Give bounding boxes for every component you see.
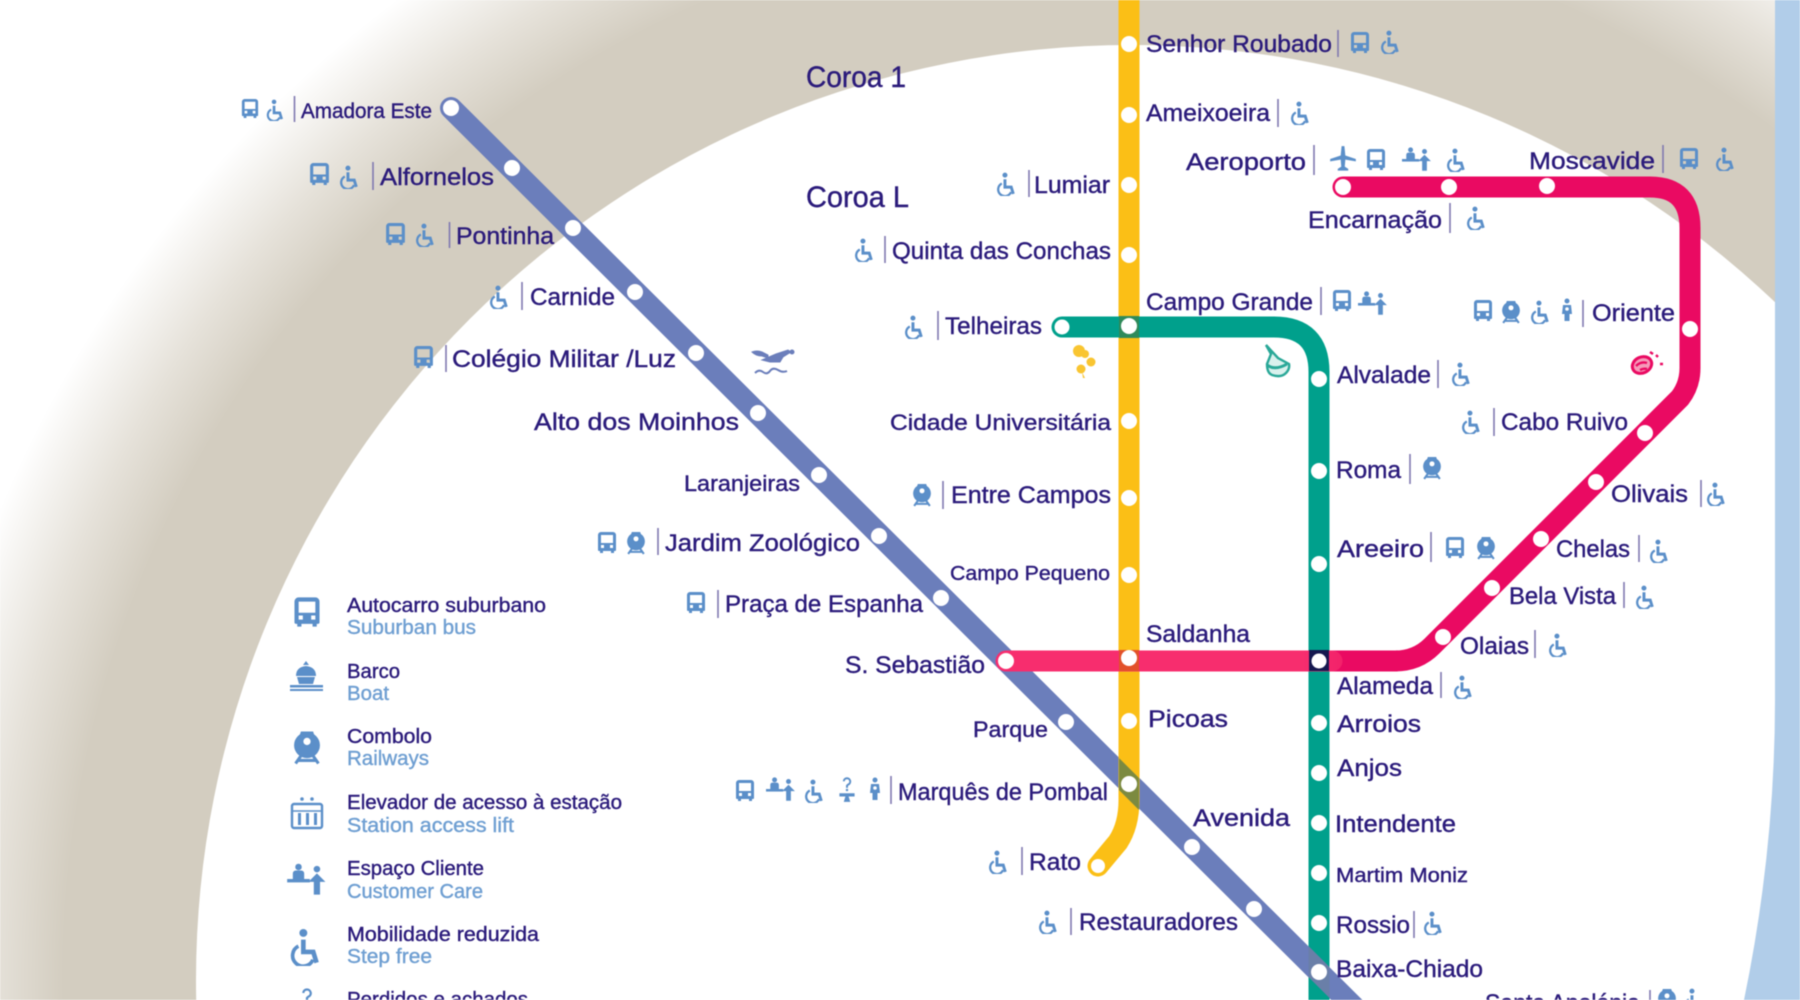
zone labels: Coroa L <box>806 181 909 214</box>
legend: suburban bus: Autocarro suburbano <box>347 595 546 617</box>
Encarnação <box>1308 203 1483 234</box>
Areeiro: Areeiro <box>1337 536 1424 563</box>
Amadora Este <box>242 96 432 123</box>
station labels: blue line <box>242 96 1483 983</box>
Olaias: Olaias <box>1460 633 1529 660</box>
Areeiro <box>1337 532 1495 563</box>
Chelas <box>1556 535 1666 563</box>
right blue margin band <box>1744 0 1800 1000</box>
Roma: Roma <box>1336 457 1402 484</box>
icon: swimmer artwork near Colégio Militar <box>752 350 794 373</box>
Oriente <box>1474 298 1675 327</box>
Olaias <box>1460 630 1565 660</box>
Moscavide: Moscavide <box>1529 148 1655 175</box>
Encarnação: Encarnação <box>1308 207 1442 234</box>
Olivais <box>1611 480 1723 508</box>
Marquês de Pombal <box>736 776 1108 806</box>
Lumiar: Lumiar <box>1034 172 1110 199</box>
Pontinha <box>386 222 555 250</box>
legend: boat <box>290 661 400 705</box>
zone labels <box>806 61 909 214</box>
Alfornelos: Alfornelos <box>380 164 494 191</box>
Aeroporto: Aeroporto <box>1186 149 1306 176</box>
Santa Apolónia <box>1485 989 1700 1000</box>
legend: step free <box>293 924 540 968</box>
yellow line (Amarela) <box>1091 0 1139 873</box>
legend: customer care <box>287 858 484 903</box>
Carnide: Carnide <box>530 284 615 311</box>
Telheiras <box>906 311 1042 340</box>
Anjos: Anjos <box>1337 755 1402 782</box>
icon: yellow flower artwork near Telheiras <box>1073 345 1096 378</box>
Cabo Ruivo: Cabo Ruivo <box>1501 409 1628 436</box>
Arroios: Arroios <box>1337 711 1421 738</box>
legend: station access lift: Elevador de acesso à estação <box>347 792 622 814</box>
Pontinha: Pontinha <box>456 223 555 250</box>
Jardim Zoológico: Jardim Zoológico <box>665 530 860 557</box>
legend: suburban bus <box>294 595 546 639</box>
Marquês de Pombal: Marquês de Pombal <box>898 779 1108 806</box>
Campo Pequeno: Campo Pequeno <box>950 563 1110 585</box>
Entre Campos: Entre Campos <box>951 482 1111 509</box>
Bela Vista: Bela Vista <box>1509 583 1617 610</box>
Olivais: Olivais <box>1611 481 1688 508</box>
Parque: Parque <box>973 717 1048 742</box>
legend: station access lift: Station access lift <box>347 815 514 837</box>
legend: customer care: Customer Care <box>347 881 483 903</box>
Senhor Roubado <box>1146 30 1397 58</box>
legend: customer care: Espaço Cliente <box>347 858 484 880</box>
Oriente: Oriente <box>1592 300 1675 327</box>
Jardim Zoológico <box>598 528 860 557</box>
Alvalade: Alvalade <box>1337 362 1431 389</box>
Picoas: Picoas <box>1148 706 1228 733</box>
green line (Verde) <box>1054 316 1327 1000</box>
Aeroporto <box>1186 145 1463 176</box>
Alameda <box>1337 672 1470 700</box>
blue line (Azul) <box>443 100 1380 1000</box>
legend: boat: Barco <box>347 661 400 683</box>
Campo Grande: Campo Grande <box>1146 289 1313 316</box>
Avenida: Avenida <box>1193 805 1291 832</box>
legend: station access lift <box>292 792 622 837</box>
legend: railways <box>294 726 432 770</box>
station labels: red line <box>1186 145 1732 1000</box>
zone labels: Coroa 1 <box>806 61 906 94</box>
Laranjeiras: Laranjeiras <box>684 471 800 496</box>
Chelas: Chelas <box>1556 536 1630 563</box>
Carnide <box>491 282 615 311</box>
Intendente: Intendente <box>1335 811 1456 838</box>
legend: boat: Boat <box>347 683 389 705</box>
Quinta das Conchas: Quinta das Conchas <box>892 238 1111 265</box>
Colégio Militar / Luz: Colégio Militar /Luz <box>452 346 676 373</box>
blue over green at Baixa-Chiado <box>1308 946 1330 998</box>
legend: step free: Step free <box>347 946 432 968</box>
legend: step free: Mobilidade reduzida <box>347 924 540 946</box>
Roma <box>1336 454 1441 484</box>
Rato: Rato <box>1029 849 1081 876</box>
Campo Grande <box>1146 287 1387 316</box>
red line (Vermelha) <box>998 178 1698 671</box>
Martim Moniz: Martim Moniz <box>1336 865 1468 887</box>
Rato <box>990 847 1081 876</box>
icon: green artwork near Alvalade <box>1266 345 1289 376</box>
legend: railways: Combolo <box>347 726 432 748</box>
icon: red rose artwork near Oriente <box>1630 352 1663 376</box>
Alvalade <box>1337 360 1468 389</box>
Telheiras: Telheiras <box>945 313 1042 340</box>
legend: railways: Railways <box>347 748 429 770</box>
Alto dos Moinhos: Alto dos Moinhos <box>534 409 739 436</box>
Alameda: Alameda <box>1337 673 1434 700</box>
Rossio <box>1336 911 1440 939</box>
station labels: yellow line <box>856 30 1397 876</box>
Praça de Espanha: Praça de Espanha <box>725 591 924 618</box>
Ameixoeira: Ameixoeira <box>1146 100 1271 127</box>
Lumiar <box>998 170 1110 199</box>
Restauradores: Restauradores <box>1079 909 1238 936</box>
S. Sebastião: S. Sebastião <box>845 652 985 679</box>
legend <box>287 595 622 1000</box>
Alfornelos <box>310 162 494 191</box>
Rossio: Rossio <box>1336 912 1410 939</box>
Senhor Roubado: Senhor Roubado <box>1146 31 1332 58</box>
Saldanha: Saldanha <box>1146 621 1251 648</box>
Amadora Este: Amadora Este <box>301 100 432 123</box>
station labels: green line <box>906 311 1495 939</box>
legend: suburban bus: Suburban bus <box>347 617 476 639</box>
Moscavide <box>1529 145 1732 175</box>
Baixa-Chiado: Baixa-Chiado <box>1336 956 1483 983</box>
Cidade Universitária: Cidade Universitária <box>890 410 1112 435</box>
